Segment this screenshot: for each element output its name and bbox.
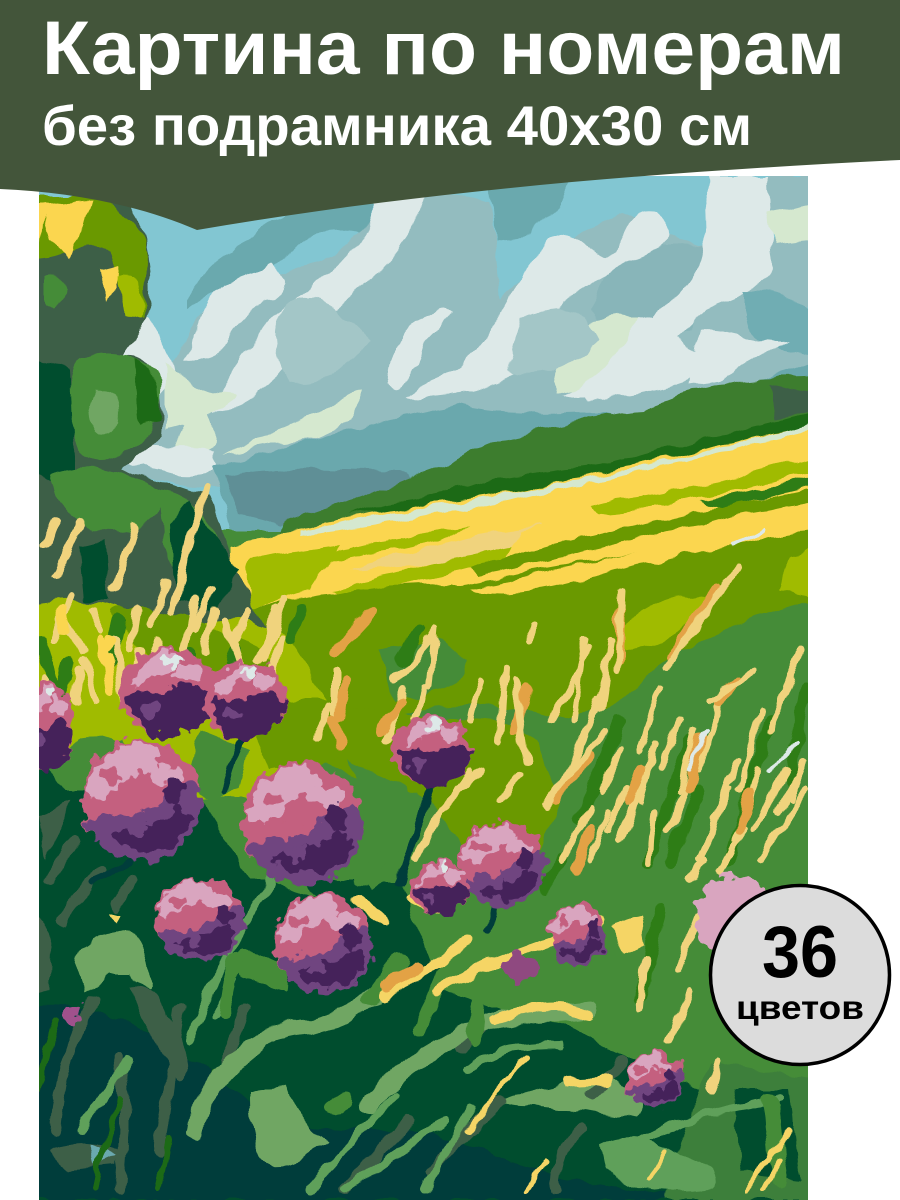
field: [230, 424, 815, 728]
mid green meadow: [406, 602, 808, 726]
flower: [204, 662, 288, 740]
badge: 36 colours: 36: [762, 912, 838, 993]
subtitle: без подрамника 40x30 см: [42, 94, 752, 157]
flower: [411, 861, 469, 916]
header banner: [0, 0, 900, 230]
foreground leaves: [50, 930, 716, 1192]
left tree: [39, 194, 266, 628]
flower: [692, 870, 766, 950]
flower: [39, 680, 78, 774]
flower: [62, 1003, 82, 1023]
flower: [81, 740, 201, 861]
dark foreground: [0, 730, 815, 1200]
yellow grass ears: [45, 490, 805, 1190]
badge: 36 colours: [710, 886, 890, 1064]
painting: meadow landscape: [39, 176, 808, 1200]
flower: [625, 1051, 683, 1108]
flower: [154, 878, 244, 961]
flower: [502, 955, 538, 981]
title: Картина по номерам: [42, 6, 845, 91]
sky: [39, 176, 808, 530]
badge: 36 colours: цветов: [736, 989, 864, 1026]
flower: [459, 822, 545, 907]
tree line: [280, 376, 815, 535]
leaf blades and stems: [40, 610, 805, 1190]
flower: [118, 649, 218, 737]
upper-left yellow-green grass: [39, 597, 326, 800]
clover flowers: [23, 649, 775, 1108]
flower: [242, 763, 362, 884]
flower: [550, 902, 606, 965]
clouds: [120, 176, 815, 490]
flower: [393, 715, 471, 788]
distant hills: [215, 360, 815, 530]
flower: [273, 893, 373, 994]
